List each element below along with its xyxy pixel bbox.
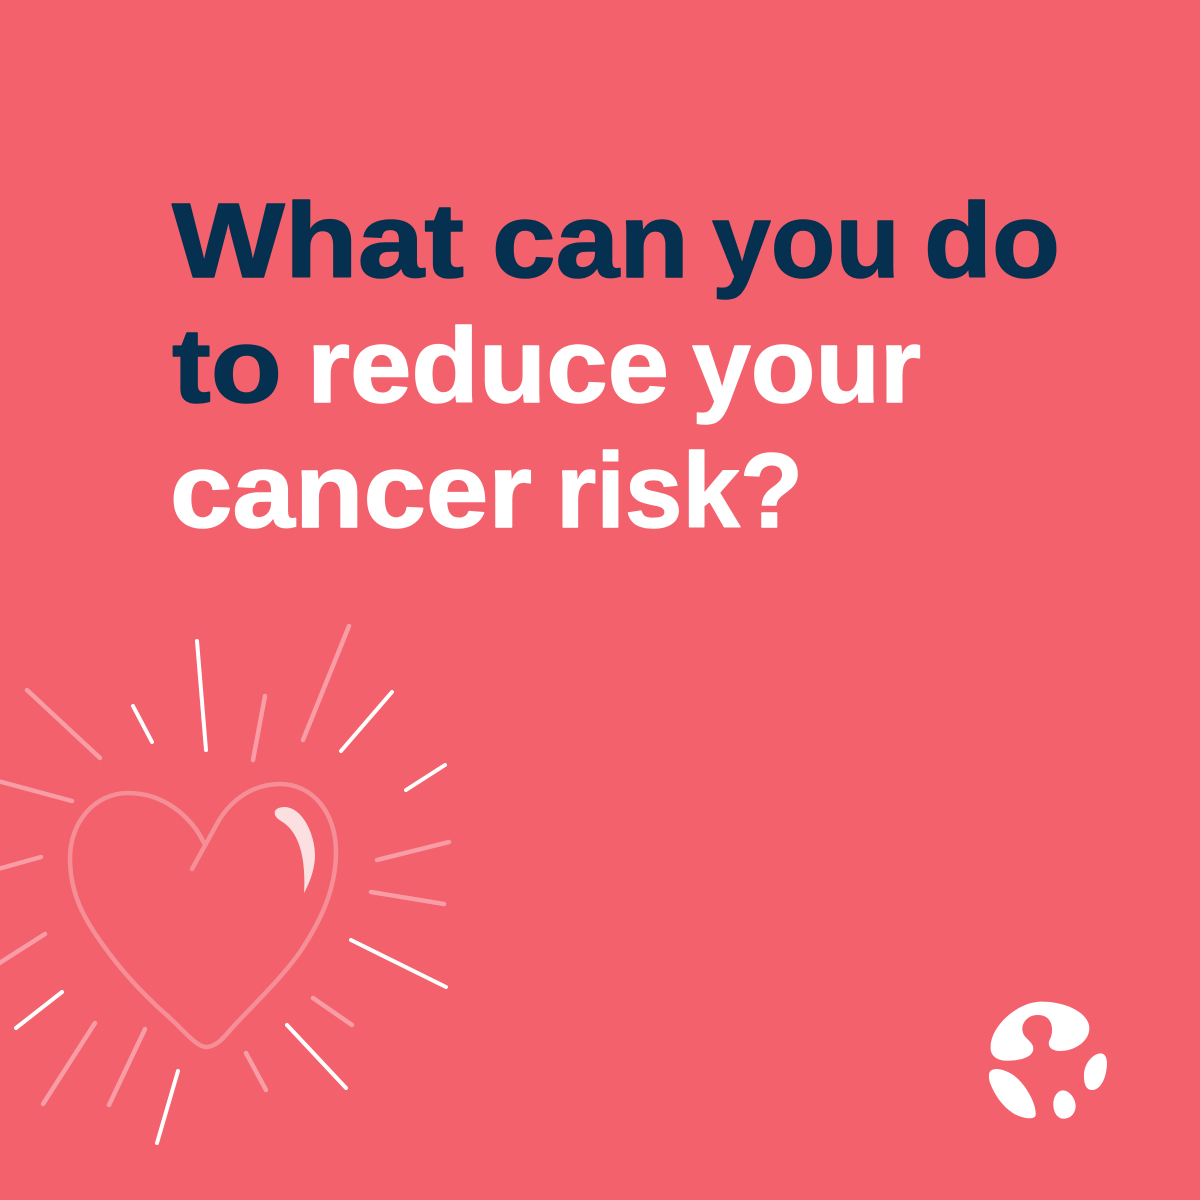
heart outline	[70, 784, 336, 1047]
title: do	[924, 182, 1060, 300]
title: risk?	[556, 432, 803, 550]
title: you	[712, 182, 900, 300]
icon: heart with rays	[0, 626, 449, 1143]
title: can	[492, 182, 689, 300]
white rays	[16, 641, 446, 1143]
title: What	[172, 182, 464, 300]
title	[170, 182, 1060, 550]
heart highlight	[275, 807, 315, 893]
title: your	[692, 307, 921, 425]
icon: logo	[989, 1002, 1107, 1119]
title: reduce	[307, 307, 669, 425]
title: to	[172, 307, 282, 425]
pink rays	[0, 626, 449, 1105]
title: cancer	[170, 432, 532, 550]
